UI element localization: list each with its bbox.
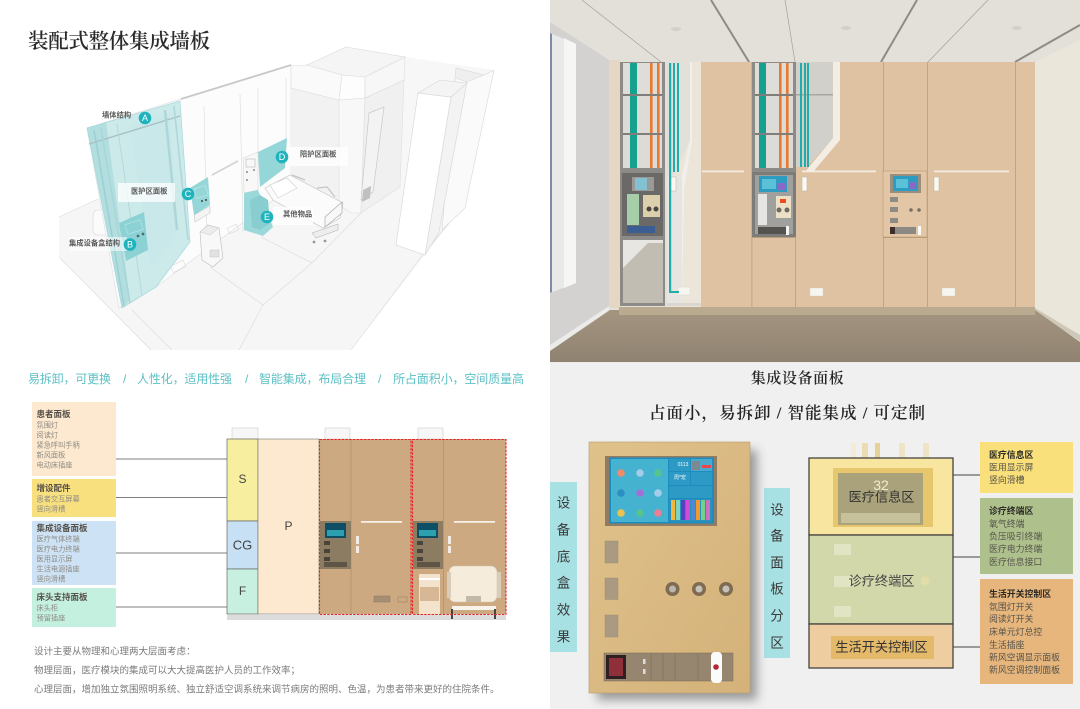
callout C: medical zone panel bbox=[131, 186, 194, 200]
label backgrounds bbox=[118, 183, 175, 202]
callout C: medical zone panel: C bbox=[185, 189, 192, 199]
callout A: wall structure bbox=[102, 110, 151, 124]
zone: living switch controls bbox=[809, 624, 953, 668]
exposed frame 2 bbox=[752, 62, 840, 172]
legend: living switch control zone: 新风空调控制面板 bbox=[989, 664, 1060, 675]
callout B: integrated equipment box structure bbox=[69, 238, 136, 251]
lower right background bbox=[550, 363, 1080, 709]
panel: patient panel legend: 阅读灯 bbox=[36, 430, 58, 440]
callout E: other items bbox=[261, 210, 312, 223]
gas terminals bbox=[666, 582, 733, 596]
panel: bedside support panel legend: 床头支持面板 bbox=[36, 592, 88, 602]
bed elevation bbox=[447, 566, 501, 619]
zone F: F bbox=[239, 584, 246, 598]
touch screen: 周*宏 bbox=[674, 474, 686, 481]
subheading: panel benefits: 占面小，易拆卸 / 智能集成 / 可定制 bbox=[649, 402, 925, 424]
panel: patient panel legend bbox=[32, 402, 116, 476]
design rationale text block: 心理层面，增加独立氛围照明系统、独立舒适空调系统来调节病房的照明、色温，为患者带来更好的住院条件。 bbox=[34, 684, 500, 696]
callout C: medical zone panel: 医护区面板 bbox=[131, 186, 168, 196]
zone S: S bbox=[238, 472, 247, 486]
panel: integrated equipment panel legend: 竖向滑槽 bbox=[36, 574, 65, 584]
panel: patient panel legend: 患者面板 bbox=[36, 409, 71, 419]
bed bbox=[265, 175, 343, 243]
design rationale text block bbox=[34, 646, 500, 696]
control strip bbox=[604, 652, 733, 683]
illustration: isometric hospital room bbox=[59, 47, 494, 350]
tagline row: 智能集成，布局合理 bbox=[259, 371, 366, 386]
title: prefabricated integrated wall panel: 装配式整体集成墙板 bbox=[28, 30, 210, 53]
panel: integrated equipment panel legend: 医疗气体终端 bbox=[36, 534, 80, 544]
callout A: wall structure: 墙体结构 bbox=[102, 110, 131, 120]
panel: bedside support panel legend bbox=[32, 588, 116, 627]
callout E: other items: E bbox=[264, 212, 270, 222]
label: base box effect bbox=[550, 482, 577, 652]
zone: diagnostic terminals bbox=[809, 535, 953, 624]
label: panel zoning: 设备面板分区 bbox=[770, 502, 784, 650]
back wall bbox=[87, 65, 291, 308]
equipment box 2 bbox=[752, 172, 796, 237]
zone: medical information: 32 bbox=[873, 477, 889, 493]
heading: integrated equipment panel: 集成设备面板 bbox=[751, 369, 844, 387]
legend: living switch control zone bbox=[980, 579, 1073, 684]
floor bbox=[550, 310, 1080, 363]
bedside cabinet bbox=[419, 574, 440, 615]
handles bbox=[671, 177, 939, 191]
callout B: integrated equipment box structure: 集成设备盒结构 bbox=[69, 238, 120, 248]
finished equipment panel bbox=[883, 171, 927, 237]
panel: patient panel legend: 电动床插座 bbox=[36, 460, 72, 470]
panel: added accessories legend: 增设配件 bbox=[36, 483, 71, 493]
zone S bbox=[227, 439, 258, 521]
design rationale text block: 设计主要从物理和心理两大层面考虑： bbox=[34, 646, 196, 658]
legend: diagnostic terminals zone bbox=[980, 498, 1073, 574]
panel: added accessories legend bbox=[32, 479, 116, 517]
panel: added accessories legend: 竖向滑槽 bbox=[36, 504, 65, 514]
pipes 1 bbox=[669, 63, 679, 293]
pipes bbox=[851, 443, 929, 458]
panel: integrated equipment panel legend bbox=[32, 521, 116, 585]
panel: integrated equipment panel legend: 集成设备面板 bbox=[36, 523, 88, 533]
panel: patient panel legend: 新风面板 bbox=[36, 450, 65, 460]
label: panel zoning bbox=[764, 488, 790, 658]
label: base box effect: 设备底盒效果 bbox=[557, 496, 571, 644]
wall sockets bbox=[678, 287, 955, 296]
side walls bbox=[550, 22, 609, 350]
tagline row: 人性化，适用性强 bbox=[137, 372, 232, 386]
legend: living switch control zone: 生活开关控制区 bbox=[989, 588, 1051, 599]
zone: medical information bbox=[809, 458, 953, 535]
wood wall modules bbox=[319, 439, 506, 614]
bedside cabinet bbox=[200, 225, 223, 267]
legend: living switch control zone: 氛围灯开关 bbox=[989, 601, 1033, 612]
zone CG bbox=[227, 521, 258, 569]
zone P bbox=[258, 439, 319, 614]
panel: bedside support panel legend: 床头柜 bbox=[36, 604, 58, 612]
room rendering: exposed wall bbox=[550, 0, 1080, 363]
connectors to zone legend bbox=[953, 475, 980, 647]
equipment panel 1 bbox=[320, 521, 351, 569]
device panel photo bbox=[589, 442, 750, 693]
cart by bed panel bbox=[244, 190, 273, 236]
zone: living switch controls: 生活开关控制区 bbox=[835, 640, 928, 654]
bathroom enclosure bbox=[400, 57, 494, 232]
tagline row: / bbox=[378, 372, 382, 386]
connector lines bbox=[116, 459, 258, 607]
equipment panel 2 bbox=[413, 521, 443, 569]
wood wall bbox=[701, 62, 1035, 307]
legend: diagnostic terminals zone: 诊疗终端区 bbox=[989, 505, 1033, 516]
callout A: wall structure: A bbox=[142, 113, 148, 123]
far wall column bbox=[442, 68, 494, 230]
panel: patient panel legend: 紧急呼叫手柄 bbox=[36, 440, 80, 450]
panel: patient panel legend: 氛围灯 bbox=[36, 420, 58, 430]
panel: bedside support panel legend: 预留插座 bbox=[36, 614, 65, 622]
elevation diagram bbox=[227, 428, 506, 620]
touch screen: 0113 bbox=[678, 462, 689, 468]
tagline row: / bbox=[123, 372, 127, 386]
tagline row: / bbox=[245, 372, 249, 386]
touch screen bbox=[605, 456, 717, 526]
legend: medical information zone: 医疗信息区 bbox=[989, 449, 1033, 460]
legend: living switch control zone: 新风空调显示面板 bbox=[989, 652, 1060, 662]
zone F bbox=[227, 569, 258, 614]
panel: integrated equipment panel legend: 医用显示屏 bbox=[36, 554, 72, 564]
legend: living switch control zone: 床单元灯总控 bbox=[989, 626, 1042, 637]
legend: medical information zone: 医用显示屏 bbox=[989, 462, 1033, 472]
legend: diagnostic terminals zone: 医疗信息接口 bbox=[989, 556, 1042, 567]
callout D: companion zone panel bbox=[276, 150, 337, 163]
legend: living switch control zone: 生活插座 bbox=[989, 639, 1025, 650]
zone diagram bbox=[809, 443, 953, 668]
callout E: other items: 其他物品 bbox=[283, 210, 312, 218]
red dashed module outlines bbox=[320, 440, 411, 614]
tagline row bbox=[28, 371, 524, 386]
tagline row: 易拆卸，可更换 bbox=[28, 371, 111, 386]
zone: medical information: 医疗信息区 bbox=[849, 488, 914, 504]
tall column bbox=[425, 82, 467, 255]
zone: diagnostic terminals: 诊疗终端区 bbox=[849, 574, 914, 588]
design rationale text block: 物理层面，医疗模块的集成可以大大提高医护人员的工作效率； bbox=[34, 664, 300, 676]
legend: living switch control zone: 阅读灯开关 bbox=[989, 613, 1033, 624]
callout B: integrated equipment box structure: B bbox=[127, 240, 133, 250]
legend: diagnostic terminals zone: 负压吸引终端 bbox=[989, 530, 1042, 542]
tagline row: 所占面积小，空间质量高 bbox=[393, 371, 524, 386]
panel: added accessories legend: 患者交互屏幕 bbox=[36, 494, 80, 504]
white rails bbox=[702, 170, 1009, 172]
legend: medical information zone bbox=[980, 442, 1073, 493]
legend: diagnostic terminals zone: 医疗电力终端 bbox=[989, 543, 1042, 554]
legend: diagnostic terminals zone: 氧气终端 bbox=[989, 518, 1025, 529]
zone P: P bbox=[284, 519, 293, 533]
panel sockets bbox=[605, 541, 618, 637]
ceiling seams bbox=[582, 0, 661, 62]
callout D: companion zone panel: 陪护区面板 bbox=[300, 150, 337, 158]
legend: medical information zone: 竖向滑槽 bbox=[989, 474, 1025, 485]
panel: integrated equipment panel legend: 医疗电力终端 bbox=[36, 544, 80, 554]
wall structure translucent panel bbox=[87, 101, 190, 308]
callout D: companion zone panel: D bbox=[279, 152, 286, 162]
exposed frame 1 bbox=[620, 62, 665, 306]
panel: integrated equipment panel legend: 生活电源插座 bbox=[36, 564, 80, 574]
zone CG: CG bbox=[233, 538, 252, 552]
ghost bed behind panel bbox=[93, 210, 113, 235]
